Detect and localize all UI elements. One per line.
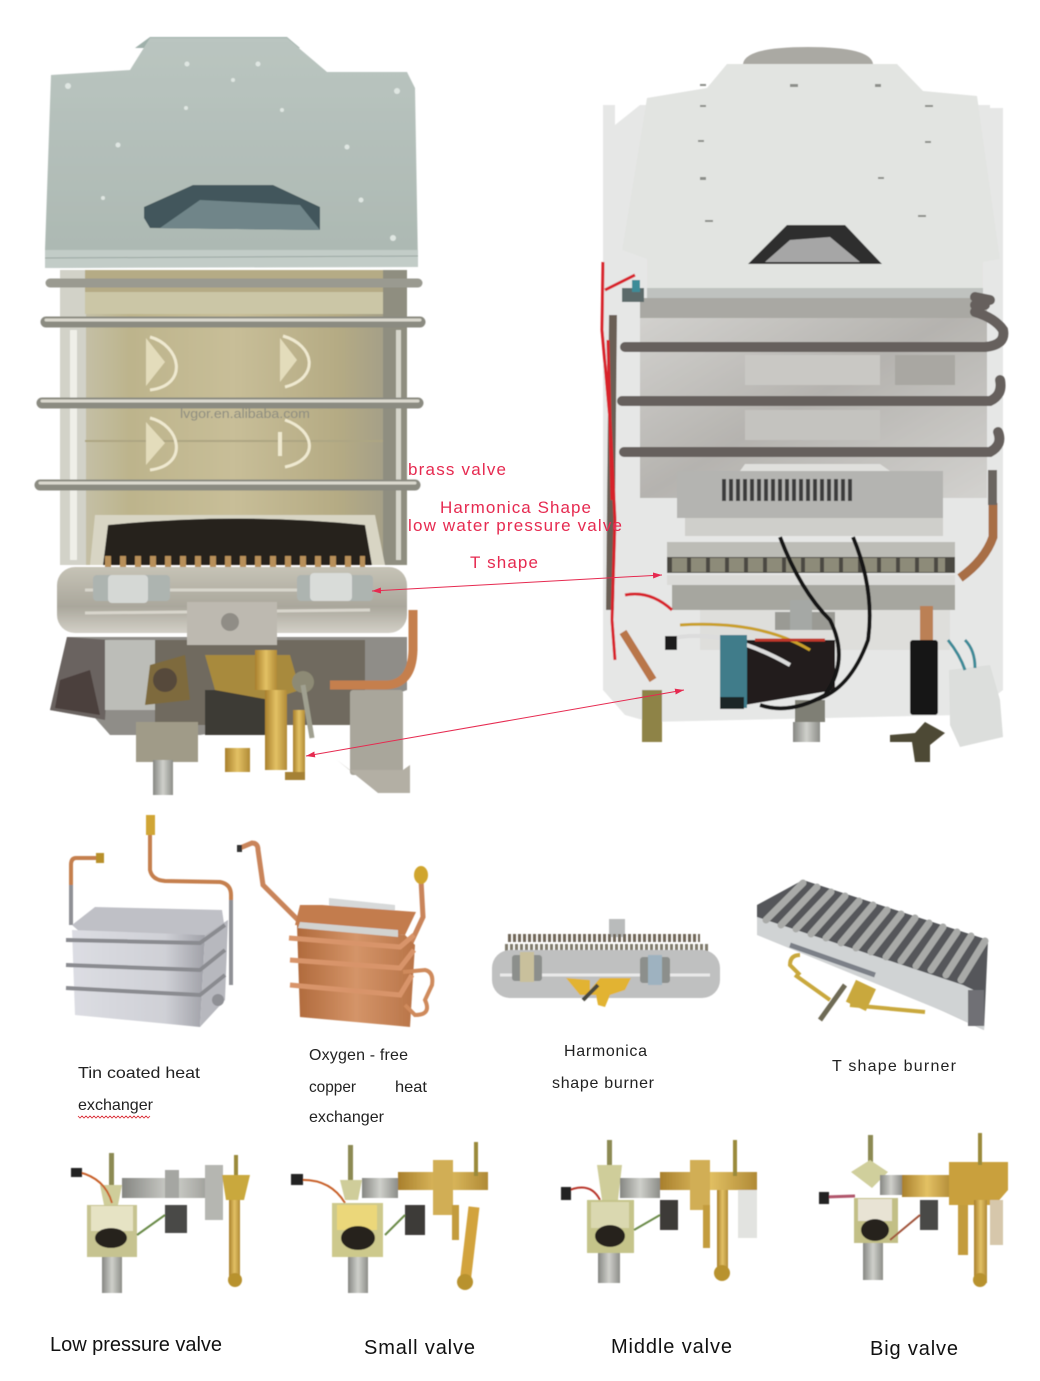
label: oxygen-free copper heat exchanger: copper [309,1079,357,1096]
shroud window [748,225,882,264]
exchanger pipes [622,297,1003,452]
part: T shape burner [757,880,988,1030]
label: harmonica shape burner [552,1043,655,1092]
label: tin coated heat exchanger [78,1065,201,1118]
label: brass valve: brass valve [408,460,506,479]
label: middle valve: Middle valve [611,1336,732,1358]
top shroud [622,64,1000,288]
slotted retainer strip [790,945,875,975]
label: low water pressure valve: low water pressure valve [408,516,622,535]
burner rail [667,542,955,557]
label: low pressure valve: Low pressure valve [50,1334,222,1356]
stamped D marks [146,336,309,470]
brass burner teeth [105,556,365,568]
part: small valve [291,1142,488,1293]
annotation labels in red [408,460,622,572]
part: harmonica shape burner [492,919,720,1007]
burner opening [90,515,385,565]
shroud marks [698,84,933,222]
left copper and wires [610,315,613,610]
arrow: brass valve to low pressure valve [306,690,684,756]
control box cover [677,471,943,518]
black water valve [910,640,938,715]
plate lower folded edge [45,250,418,268]
back plate [603,105,1003,722]
burner body [57,567,407,633]
photo: rear of water heater with T shape burner [602,47,1003,762]
exchanger foil body [640,298,987,498]
label: harmonica shape: Harmonica Shape [440,498,591,517]
gas valve assembly [205,655,300,700]
part: tin coated heat exchanger [66,815,231,1027]
black cables [760,537,870,708]
gas valve body [790,600,812,630]
vent slots [722,479,853,501]
label: T shape: T shape [470,553,538,572]
wiring harness [735,640,835,705]
part: oxygen-free copper heat exchanger [237,843,432,1027]
label: tin coated heat exchanger: Tin coated heat [78,1065,201,1082]
lower panel [700,610,950,650]
outlet knob [890,722,945,762]
label: harmonica shape burner: Harmonica [564,1043,647,1060]
photo: front of water heater with heat exchanger and harmonica burner [40,37,420,795]
plate window [144,185,320,230]
part: middle valve [561,1140,757,1283]
right copper pipe [960,503,993,578]
label: oxygen-free copper heat exchanger [309,1047,428,1126]
wrapping pipes [40,283,420,485]
arrows from burners to valves across both photos [306,575,684,756]
label: oxygen-free copper heat exchanger: exchanger [309,1109,385,1126]
label: harmonica shape burner: shape burner [552,1075,655,1092]
lower housing [50,637,407,735]
copper inlet [920,606,933,641]
flue cylinder [743,47,873,64]
part: low pressure valve [71,1153,250,1293]
shroud bottom strip [647,288,983,298]
label: tin coated heat exchanger: exchanger [78,1097,154,1114]
watermark: lvgor.en.alibaba.com [180,406,310,421]
connector cluster [622,288,644,302]
label: big valve: Big valve [870,1338,958,1360]
burner rollers [672,558,945,572]
label: oxygen-free copper heat exchanger: heat [395,1079,428,1096]
label: oxygen-free copper heat exchanger: Oxygen - free [309,1047,408,1064]
top plate [45,38,418,268]
flue collar [135,37,300,48]
heat exchanger body [60,270,407,565]
label: T shape burner: T shape burner [832,1058,957,1075]
teal ignition block [720,635,747,708]
copper pipe [330,610,413,685]
burner clamps [93,575,170,601]
part: big valve [819,1133,1008,1287]
left brass fitting [642,690,662,742]
label: small valve: Small valve [364,1337,475,1359]
centre bracket [187,602,277,645]
arrow: harmonica to T shape [372,575,662,591]
condensate box [350,690,403,775]
plate rivets [65,62,400,241]
white sensor box [949,665,1003,747]
